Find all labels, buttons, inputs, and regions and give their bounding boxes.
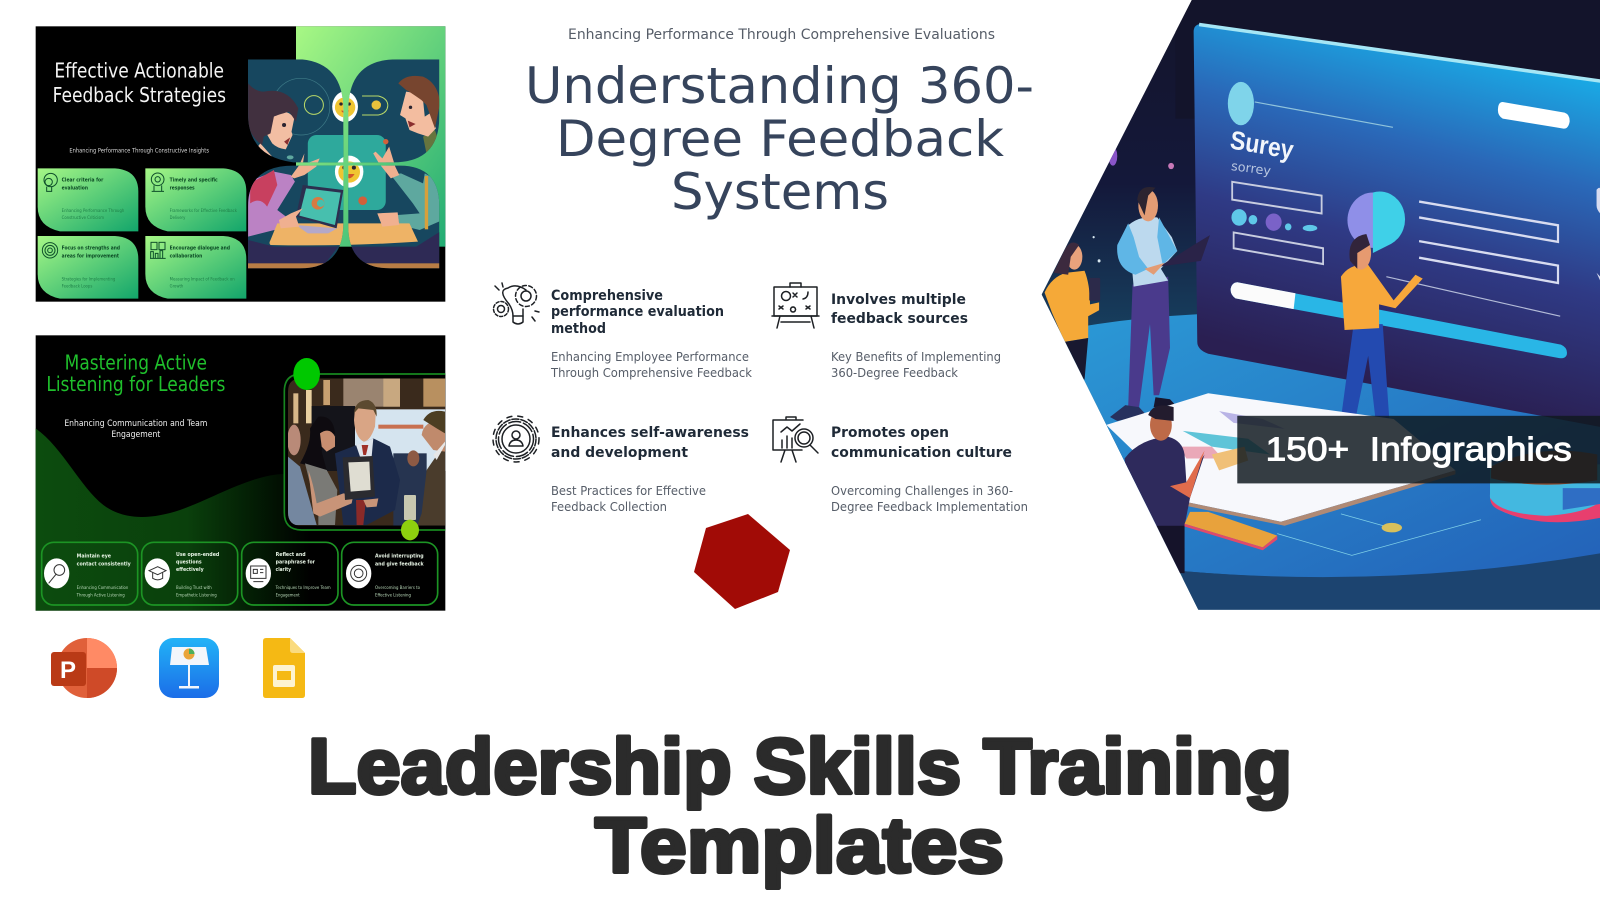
badge: 150+ infographics — [1237, 416, 1600, 483]
slide title: Listening for Leaders — [46, 372, 225, 396]
slide title: Feedback Strategies — [53, 83, 226, 107]
man at right — [418, 451, 445, 526]
panel: slide preview Mastering Active Listening for Leaders — [36, 335, 447, 611]
card text: Maintain eye — [77, 553, 112, 559]
feature text: and development — [551, 445, 688, 461]
card text: evaluation — [62, 185, 88, 191]
laptop — [296, 185, 343, 228]
icon: Google Slides — [263, 638, 305, 698]
card icon — [44, 558, 69, 588]
card text: Building Trust with — [176, 585, 212, 590]
feature: comprehensive evaluation — [494, 283, 752, 380]
card: timely responses — [145, 168, 246, 231]
card text: paraphrase for — [276, 560, 316, 566]
red hexagon — [694, 514, 790, 609]
card: open-ended questions — [142, 542, 238, 605]
feature text: performance evaluation — [551, 304, 724, 320]
eyebrow subtitle: Enhancing Performance Through Comprehensive Evaluations — [568, 27, 995, 43]
feature text: Best Practices for Effective — [551, 484, 706, 498]
icon: PowerPoint — [51, 638, 117, 698]
card icon — [151, 173, 164, 191]
card text: Techniques to Improve Team — [275, 585, 331, 590]
card text: Feedback Loops — [62, 284, 93, 290]
slide title — [53, 59, 226, 107]
feature text: Degree Feedback Implementation — [831, 500, 1028, 514]
man arm — [391, 173, 443, 230]
illustration scene: Surey — [1228, 126, 1295, 165]
slide title: Mastering Active — [65, 351, 207, 375]
illustration: two people discussing feedback — [247, 57, 447, 270]
card text: Delivery — [170, 215, 186, 221]
card text: Focus on strengths and — [62, 246, 120, 252]
photo: award presentation — [287, 377, 447, 527]
icon: PowerPoint: P — [60, 657, 76, 684]
card text — [176, 552, 220, 598]
main heading: Degree Feedback — [556, 110, 1004, 168]
card: focus on strengths — [38, 236, 138, 299]
card icon — [246, 558, 271, 588]
woman body and arm — [248, 172, 295, 237]
feature text: Comprehensive — [551, 288, 663, 304]
card text: areas for improvement — [62, 253, 120, 259]
card text: Overcoming Barriers to — [375, 585, 421, 590]
icon: lightbulb with gears — [494, 283, 539, 324]
icon: chart presentation with magnifier — [773, 417, 818, 462]
feature text: feedback sources — [831, 311, 968, 327]
card icon — [150, 242, 166, 258]
main title: Templates — [595, 801, 1004, 889]
card text: Growth — [170, 284, 184, 290]
slide background — [36, 26, 445, 302]
card: encourage dialogue — [145, 236, 246, 299]
slide title: Effective Actionable — [54, 59, 224, 83]
illustration scene — [1030, 0, 1600, 610]
round chart stack — [1490, 464, 1600, 521]
feature text: Enhances self-awareness — [551, 425, 749, 441]
feature text — [551, 425, 749, 514]
card text: clarity — [276, 567, 292, 573]
badge text: 150+ Infographics — [1266, 430, 1572, 468]
document sheet — [1106, 393, 1455, 522]
card text: effectively — [176, 567, 204, 573]
icon: gear with person — [493, 416, 539, 462]
card icon — [346, 558, 371, 588]
person pointing at screen — [1341, 324, 1389, 419]
feature text: Key Benefits of Implementing — [831, 350, 1001, 364]
card: maintain eye contact — [42, 542, 138, 605]
main heading: Understanding 360- — [525, 57, 1034, 115]
main heading: Systems — [671, 163, 889, 221]
card text: Encourage dialogue and — [170, 246, 230, 252]
card text: Enhancing Communication — [77, 585, 129, 590]
card text: Use open-ended — [176, 552, 220, 558]
decorative green circle — [293, 358, 320, 390]
feature: open communication — [773, 417, 1028, 514]
main heading — [525, 57, 1034, 221]
man in suit — [335, 438, 400, 525]
card text: Strategies for Implementing — [62, 276, 116, 282]
framed certificate — [343, 456, 375, 500]
dark green wave — [36, 428, 310, 611]
photo frame — [284, 374, 445, 530]
slide title — [46, 351, 225, 396]
man with open book — [1128, 277, 1170, 407]
card text: responses — [170, 185, 195, 191]
card text: and give feedback — [375, 561, 424, 567]
card text — [62, 246, 120, 290]
card text: Engagement — [276, 593, 300, 598]
slide subtitle: Enhancing Communication and Team — [64, 419, 207, 429]
feature text: Involves multiple — [831, 292, 966, 308]
card text: Through Active Listening — [76, 593, 125, 598]
feature text: method — [551, 321, 606, 337]
panel: survey illustration in hexagon — [1030, 0, 1600, 610]
slide subtitle: Enhancing Performance Through Constructive Insights — [69, 148, 209, 155]
card text — [62, 177, 125, 221]
card: avoid interrupting — [342, 542, 438, 605]
woman — [300, 417, 335, 470]
feature text: Promotes open — [831, 425, 949, 441]
feature text — [831, 425, 1028, 514]
feature text: Through Comprehensive Feedback — [550, 366, 752, 380]
illustration scene: sorrey — [1230, 159, 1272, 178]
man head — [423, 130, 437, 152]
slide background — [36, 335, 445, 611]
card icon — [145, 558, 170, 588]
card text: Empathetic Listening — [176, 593, 217, 598]
feature text: Overcoming Challenges in 360- — [831, 484, 1013, 498]
decorative lime circle — [401, 520, 419, 540]
card text: Reflect and — [276, 552, 306, 558]
card icon — [44, 173, 57, 191]
card text — [375, 553, 424, 598]
feature text — [550, 288, 752, 380]
card: clear criteria — [38, 168, 138, 231]
card text — [275, 552, 331, 598]
green corner block — [296, 26, 445, 247]
card text: contact consistently — [77, 561, 131, 567]
slide subtitle — [64, 419, 207, 440]
card text: collaboration — [170, 253, 203, 259]
feature: multiple sources — [772, 283, 1001, 380]
woman head — [258, 144, 272, 156]
panel: slide preview Effective Actionable Feedback Strategies — [36, 26, 447, 302]
feature text: Enhancing Employee Performance — [551, 350, 749, 364]
card text: Clear criteria for — [62, 177, 104, 183]
card text: Timely and specific — [170, 177, 218, 183]
panel: 360-degree feedback slide — [493, 27, 1034, 609]
phone on floor — [1185, 512, 1277, 547]
card text: Frameworks for Effective Feedback — [170, 208, 237, 214]
card text: Avoid interrupting — [375, 553, 424, 559]
card text — [170, 177, 237, 221]
feature text — [831, 292, 1001, 380]
card text — [170, 246, 235, 290]
card text: Constructive Criticism — [62, 215, 104, 221]
icon: Keynote — [159, 638, 219, 698]
feature text: 360-Degree Feedback — [831, 366, 958, 380]
card text: questions — [176, 560, 202, 566]
card text: Enhancing Performance Through — [62, 208, 125, 214]
feature text: communication culture — [831, 445, 1012, 461]
feature: self-awareness — [493, 416, 749, 514]
slide subtitle: Engagement — [111, 430, 161, 440]
left woman with phone — [1045, 271, 1099, 342]
main title — [308, 722, 1292, 889]
main title: Leadership Skills Training — [308, 722, 1292, 810]
card text: Effective Listening — [375, 593, 411, 598]
table — [248, 230, 443, 268]
icon: strategy board on easel — [772, 283, 819, 328]
man at table — [1125, 437, 1205, 573]
card text — [76, 553, 131, 598]
feature text: Feedback Collection — [551, 500, 667, 514]
card icon — [42, 243, 58, 258]
card text: Measuring Impact of Feedback on — [170, 276, 235, 282]
card: reflect and paraphrase — [242, 542, 338, 605]
